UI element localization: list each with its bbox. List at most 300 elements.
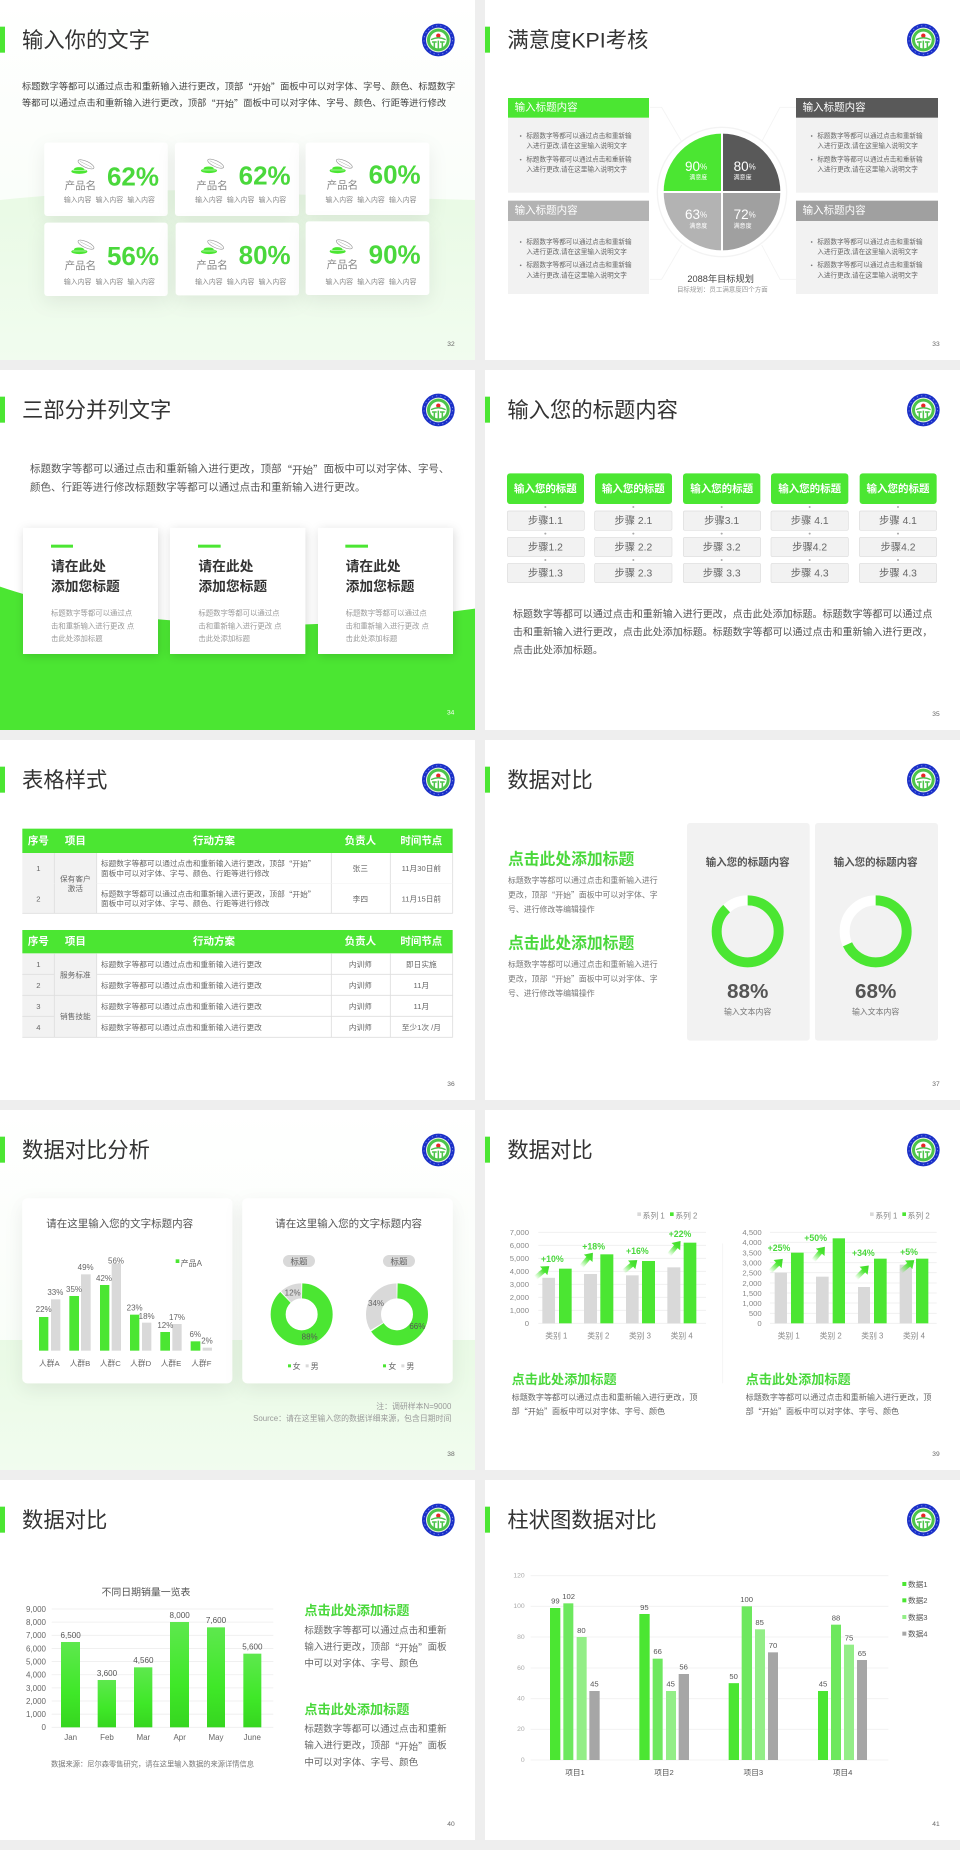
growth arrows [766, 1243, 918, 1282]
page number: 35 [932, 711, 940, 718]
slide 41: column chart comparison [485, 1480, 960, 1840]
axis labels: 60 [517, 1665, 525, 1672]
table 1: 11月15日前 [402, 894, 441, 904]
slide 40: monthly sales [0, 1480, 475, 1840]
pie chart: 90% [685, 159, 707, 174]
intro text [22, 79, 455, 110]
text block 2: 输入进行更改，顶部“开始”面板 [304, 1739, 447, 1753]
bar values: 56% [108, 1257, 124, 1266]
value labels: 80 [577, 1626, 586, 1635]
category labels: 项目1 [565, 1768, 585, 1777]
card: 80% [176, 223, 299, 295]
text block 1: 号、进行修改等编辑操作 [508, 904, 595, 914]
category labels: 人群F [191, 1358, 212, 1368]
bar values: 35% [66, 1285, 82, 1294]
category labels: 类别 3 [861, 1331, 883, 1341]
growth labels [541, 1229, 692, 1264]
table 1: 行动方案 [193, 834, 235, 847]
step column 3 [683, 473, 761, 583]
step column 5: 输入您的标题 [867, 482, 930, 495]
logo [907, 24, 940, 56]
axis labels: 0 [42, 1723, 47, 1732]
axis labels: 5,000 [26, 1657, 47, 1666]
bars [775, 1238, 928, 1323]
title: 满意度KPI考核 [507, 28, 648, 52]
card 3: 添加您标题 [346, 578, 415, 594]
text block right [746, 1371, 931, 1417]
axis labels [26, 1605, 47, 1732]
card: 80%: 80% [239, 240, 291, 270]
table 1: 李四 [353, 894, 368, 904]
axis labels: 4,500 [742, 1228, 762, 1237]
text block 1: 点击此处添加标题 [508, 850, 634, 869]
page number: 36 [447, 1081, 455, 1088]
connector lines [650, 107, 796, 279]
text block 1 [508, 850, 658, 914]
value labels [551, 1592, 866, 1689]
step column 3: 步骤 3.2 [703, 541, 741, 553]
table 2: 内训师 [349, 959, 372, 969]
card 2: 击此处添加标题 [198, 634, 251, 643]
axis labels: 9,000 [26, 1605, 47, 1614]
panel: bottom right: 标题数字等都可以通过点击和重新输 [817, 237, 923, 246]
text block 2: 标题数字等都可以通过点击和重新输入进行 [508, 959, 658, 969]
pie chart: 63% [685, 207, 707, 222]
table 2: 标题数字等都可以通过点击和重新输入进行更改 [101, 1001, 262, 1011]
panel: donut 68%: 68% [855, 980, 896, 1003]
card: 56%: 输入内容 输入内容 输入内容 [64, 277, 155, 286]
step column 2: 输入您的标题 [602, 482, 665, 495]
axis labels: 7,000 [26, 1631, 47, 1640]
legend [902, 1579, 928, 1639]
bar values: 23% [127, 1304, 143, 1313]
bar values [36, 1257, 213, 1346]
table 2: 序号 [28, 935, 49, 948]
table 2: 内训师 [349, 1001, 372, 1011]
intro text: 标题数字等都可以通过点击和重新输入进行更改，顶部“开始”面板中可以对字体、字号、颜色、标题数字 [22, 79, 455, 93]
panel: donut 88% [687, 823, 810, 1041]
title: 数据对比分析 [22, 1138, 150, 1162]
value labels: 66 [653, 1647, 662, 1656]
category labels: 项目4 [833, 1768, 853, 1777]
table 2: 时间节点 [400, 935, 443, 948]
bar values: 33% [47, 1288, 63, 1297]
source note: Source：请在这里输入您的数据详细来源，包含日期时间 [253, 1413, 451, 1423]
title: 数据对比 [507, 768, 593, 792]
panel: donut 68% [815, 823, 938, 1041]
text block 1 [304, 1602, 447, 1670]
step column 5: 步骤 4.1 [879, 515, 917, 527]
table 2: 内训师 [349, 1022, 372, 1032]
logo [422, 394, 455, 426]
value labels: 95 [640, 1603, 649, 1612]
logo [907, 764, 940, 796]
logo [907, 1504, 940, 1536]
card 3: 击和重新输入进行更改 点 [346, 622, 429, 631]
text block 1: 更改，顶部“开始”面板中可以对字体、字 [508, 890, 658, 901]
month labels: May [208, 1733, 224, 1742]
slide background [485, 740, 960, 1100]
step column 4: 输入您的标题 [778, 482, 842, 495]
category labels: 项目3 [744, 1768, 763, 1777]
value labels: 50 [729, 1672, 738, 1681]
table 1 [22, 829, 453, 913]
panel: top right: 标题数字等都可以通过点击和重新输 [817, 154, 923, 163]
step column 4 [771, 473, 848, 583]
card: 56%: 产品名 [65, 259, 96, 272]
logo [907, 1134, 940, 1166]
month labels: Jan [64, 1733, 77, 1742]
value labels: 56 [679, 1663, 688, 1672]
growth labels: +22% [669, 1229, 692, 1239]
card: 62% A: 输入内容 输入内容 输入内容 [64, 195, 155, 204]
panel: donut 88%: 输入您的标题内容 [706, 856, 790, 869]
card: 80%: 产品名 [196, 259, 228, 272]
bar values: 17% [169, 1313, 185, 1322]
donut right: 男 [406, 1362, 414, 1371]
value labels: 65 [858, 1649, 866, 1658]
axis labels: 120 [513, 1573, 525, 1580]
text block 1: 标题数字等都可以通过点击和重新输入进行 [508, 875, 658, 885]
category labels: 人群A [39, 1358, 60, 1368]
slide background [485, 370, 960, 730]
text block right: 点击此处添加标题 [746, 1371, 851, 1387]
axis labels [742, 1228, 762, 1328]
growth labels: +25% [768, 1243, 791, 1253]
axis labels: 4,000 [510, 1267, 529, 1276]
page number: 33 [932, 341, 940, 348]
title accent bar [0, 397, 5, 423]
axis labels: 8,000 [26, 1618, 47, 1627]
category labels: 类别 4 [671, 1331, 693, 1341]
legend: 数据2 [908, 1595, 928, 1605]
panel: top left: 输入标题内容 [515, 101, 578, 114]
title: 输入您的标题内容 [507, 398, 678, 422]
donut right: 66% [409, 1322, 425, 1331]
card 2: 标题数字等都可以通过点 [198, 609, 279, 618]
category labels: 类别 1 [545, 1331, 567, 1341]
axis labels: 3,000 [742, 1259, 762, 1268]
axis labels [510, 1228, 529, 1328]
category labels: 类别 1 [778, 1331, 800, 1341]
column chart [513, 1573, 888, 1777]
axis labels: 1,000 [26, 1710, 47, 1719]
legend [637, 1211, 697, 1221]
slide background [0, 0, 475, 360]
panel: bottom left: 输入标题内容 [515, 204, 578, 217]
value labels: 75 [845, 1634, 853, 1643]
panel: donut 68%: 输入您的标题内容 [834, 856, 918, 869]
axis labels [513, 1573, 525, 1764]
paragraph: 标题数字等都可以通过点击和重新输入进行更改，点击此处添加标题。标题数字等都可以通过点 [513, 607, 932, 620]
title accent bar [0, 767, 5, 793]
table 1: 标题数字等都可以通过点击和重新输入进行更改，顶部“开始” [101, 858, 315, 869]
card 1: 请在此处 [51, 558, 106, 574]
pie caption: 2088年目标规划 [687, 273, 754, 284]
slide background [0, 370, 475, 730]
sales bar chart [26, 1585, 273, 1769]
value labels [61, 1611, 263, 1678]
value labels: 7,600 [206, 1616, 227, 1625]
source note: 注：调研样本N=9000 [376, 1401, 452, 1411]
month labels: Mar [136, 1733, 151, 1742]
pie caption: 目标规划：员工满意度四个方面 [677, 284, 768, 293]
slide background [0, 740, 475, 1100]
pie chart: 满意度 [689, 222, 707, 230]
table 2: 11月 [414, 1002, 429, 1011]
value labels: 6,500 [61, 1631, 81, 1640]
table 1: 时间节点 [400, 834, 443, 847]
bars [542, 1243, 696, 1323]
title accent bar [485, 27, 490, 53]
legend: 数据3 [908, 1612, 928, 1622]
title: 三部分并列文字 [22, 398, 171, 422]
card: 90%: 产品名 [327, 258, 358, 271]
growth labels: +10% [541, 1254, 564, 1264]
card 1 [23, 528, 158, 654]
category labels [545, 1331, 693, 1341]
growth labels: +16% [626, 1246, 649, 1256]
text block left [512, 1371, 697, 1417]
bar values: 6% [190, 1330, 201, 1339]
donut left [278, 1255, 325, 1371]
card: 60% [306, 143, 429, 215]
card: 62% B [175, 143, 299, 216]
donut left: 男 [311, 1362, 319, 1371]
bar values: 49% [78, 1263, 94, 1272]
category labels [778, 1331, 926, 1341]
project 1 bars [550, 1603, 600, 1760]
panel: top right [796, 98, 938, 193]
card 1: 击和重新输入进行更改 点 [51, 622, 134, 631]
panel: bar chart [22, 1198, 232, 1383]
category labels: 人群E [161, 1358, 181, 1368]
table 1: 面板中可以对字体、字号、颜色、行距等进行修改 [101, 898, 270, 908]
panel: top right: 输入标题内容 [803, 101, 866, 114]
intro text: 标题数字等都可以通过点击和重新输入进行更改，顶部“开始”面板中可以对字体、字号、 [30, 462, 449, 477]
table 1: 面板中可以对字体、字号、颜色、行距等进行修改 [101, 868, 270, 878]
step column 4: 步骤 4.1 [791, 515, 829, 527]
text block 2: 中可以对字体、字号、颜色 [304, 1757, 419, 1769]
panel: donut 88%: 88% [727, 980, 768, 1003]
panel: top left: 标题数字等都可以通过点击和重新输 [526, 154, 632, 163]
table 2: 项目 [65, 936, 86, 948]
panel: top right: 入进行更改,请在这里输入说明文字 [817, 164, 918, 173]
green wave [0, 587, 475, 730]
legend: 系列 1 [875, 1211, 897, 1221]
page number: 37 [932, 1081, 940, 1088]
card: 60%: 产品名 [327, 178, 358, 191]
value labels: 45 [590, 1680, 599, 1689]
step column 3: 步骤3.1 [704, 515, 739, 527]
card: 62% A: 62% [107, 161, 159, 191]
axis labels: 20 [517, 1726, 525, 1733]
table 2: 即日实施 [406, 959, 437, 969]
intro text: 颜色、行距等进行修改标题数字等都可以通过点击和重新输入进行更改。 [30, 481, 366, 494]
source note [253, 1401, 452, 1423]
bar values: 22% [36, 1305, 52, 1314]
axis labels: 1,000 [742, 1299, 762, 1308]
step column 1: 步骤1.2 [528, 541, 563, 553]
category labels: 人群D [130, 1358, 152, 1368]
slide background [485, 1110, 960, 1470]
axis labels: 0 [525, 1319, 529, 1328]
card 1: 击此处添加标题 [51, 634, 103, 643]
slide 39: data comparison bars with growth [485, 1110, 960, 1470]
text block left: 部“开始”面板中可以对字体、字号、颜色 [512, 1406, 665, 1417]
value labels: 100 [740, 1595, 753, 1604]
category labels: 类别 2 [587, 1331, 609, 1341]
card: 60%: 输入内容 输入内容 输入内容 [325, 195, 417, 204]
step column 1: 输入您的标题 [514, 482, 577, 495]
card: 62% B: 产品名 [196, 179, 228, 192]
bars [61, 1622, 261, 1727]
card: 62% A: 产品名 [65, 179, 96, 192]
table 2: 2 [36, 981, 40, 990]
legend: 系列 2 [908, 1211, 930, 1221]
title: 数据对比 [22, 1508, 107, 1532]
card: 62% A [44, 143, 168, 216]
text block right: 部“开始”面板中可以对字体、字号、颜色 [746, 1406, 899, 1417]
panel: top left [508, 98, 649, 193]
axis labels: 4,000 [26, 1671, 47, 1680]
panel: donut 88%: 输入文本内容 [724, 1007, 771, 1017]
text block 1: 标题数字等都可以通过点击和重新 [304, 1624, 447, 1636]
page number: 41 [932, 1821, 940, 1828]
pie chart [657, 127, 787, 257]
panel: top left: 入进行更改,请在这里输入说明文字 [526, 141, 627, 150]
panel: bottom left: 入进行更改,请在这里输入说明文字 [526, 247, 627, 256]
growth labels [768, 1233, 918, 1258]
page number: 32 [447, 341, 455, 348]
panel: top left: 标题数字等都可以通过点击和重新输 [526, 131, 632, 140]
card: 80%: 输入内容 输入内容 输入内容 [195, 277, 286, 286]
card 1: 标题数字等都可以通过点 [51, 609, 132, 618]
step column 5 [859, 473, 937, 583]
table 1: 保有客户 [60, 874, 91, 884]
text block 1: 输入进行更改，顶部“开始”面板 [304, 1640, 447, 1654]
panel: top right: 入进行更改,请在这里输入说明文字 [817, 141, 918, 150]
value labels: 85 [755, 1618, 764, 1627]
table 1: 标题数字等都可以通过点击和重新输入进行更改，顶部“开始” [101, 889, 315, 900]
card: 90%: 输入内容 输入内容 输入内容 [325, 277, 417, 286]
table 2: 标题数字等都可以通过点击和重新输入进行更改 [101, 959, 262, 969]
value labels: 70 [769, 1641, 777, 1650]
value labels: 3,600 [97, 1669, 118, 1678]
table 1: 负责人 [345, 834, 377, 847]
step column 4: 步骤4.2 [792, 541, 827, 553]
chart left [510, 1211, 706, 1341]
step column 5: 步骤4.2 [880, 541, 916, 553]
title accent bar [485, 767, 490, 793]
slide 32: product percentages [0, 0, 475, 360]
legend: 系列 2 [675, 1211, 697, 1221]
card 2: 添加您标题 [198, 578, 267, 594]
value labels: 8,000 [170, 1611, 190, 1620]
text block 1: 点击此处添加标题 [304, 1602, 409, 1618]
text block left: 标题数字等都可以通过点击和重新输入进行更改，顶 [512, 1392, 697, 1402]
growth arrows [532, 1237, 685, 1282]
title: 表格样式 [22, 768, 107, 792]
table 1: 11月30日前 [402, 863, 441, 873]
panel: bottom left: 入进行更改,请在这里输入说明文字 [526, 270, 627, 279]
axis labels: 0 [521, 1757, 525, 1764]
axis labels: 2,000 [510, 1293, 529, 1302]
value labels: 88 [832, 1614, 840, 1623]
table 2: 销售技能 [60, 1011, 91, 1021]
category labels: 类别 2 [820, 1331, 842, 1341]
axis labels: 0 [757, 1319, 762, 1328]
table 2: 服务标准 [60, 970, 91, 980]
legend: product A: 产品A [181, 1258, 203, 1268]
text block 1: 中可以对字体、字号、颜色 [304, 1658, 419, 1670]
sales bar chart: 不同日期销量一览表 [102, 1585, 191, 1598]
donut right: 标题 [391, 1256, 408, 1266]
card 3: 请在此处 [346, 558, 401, 574]
donut left: 女 [293, 1361, 301, 1371]
table 2: 4 [36, 1023, 41, 1032]
panel: bottom right: 入进行更改,请在这里输入说明文字 [817, 270, 918, 279]
card: 60%: 60% [369, 160, 421, 190]
slide 36: table style [0, 740, 475, 1100]
step column 1 [507, 473, 584, 583]
table 1: 张三 [353, 864, 368, 873]
panel: bottom left: 标题数字等都可以通过点击和重新输 [526, 260, 632, 269]
bar values: 18% [139, 1312, 155, 1321]
month labels: Feb [100, 1733, 114, 1742]
page number: 34 [447, 709, 455, 716]
axis labels: 7,000 [510, 1228, 529, 1237]
card: 56% [44, 223, 168, 296]
table 2: 11月 [414, 981, 429, 990]
growth labels: +18% [582, 1241, 605, 1251]
month labels: Apr [173, 1733, 186, 1742]
panel: bottom right: 标题数字等都可以通过点击和重新输 [817, 260, 923, 269]
card 3: 标题数字等都可以通过点 [346, 609, 427, 618]
slide 35: step columns [485, 370, 960, 730]
category labels [39, 1358, 212, 1368]
bar values: 42% [96, 1274, 112, 1283]
axis labels: 6,000 [510, 1241, 529, 1250]
donut right: 女 [388, 1361, 396, 1371]
slide 34: three parallel cards [0, 370, 475, 730]
text block left: 点击此处添加标题 [512, 1371, 617, 1387]
month labels [64, 1733, 262, 1742]
axis labels: 2,000 [26, 1697, 47, 1706]
grouped bars [39, 1263, 212, 1351]
card 3 [318, 528, 453, 654]
page number: 38 [447, 1451, 455, 1458]
text block 2 [508, 934, 658, 998]
table 2: 标题数字等都可以通过点击和重新输入进行更改 [101, 980, 262, 990]
slide background [0, 1480, 475, 1840]
text block 2: 更改，顶部“开始”面板中可以对字体、字 [508, 974, 658, 985]
pie chart: 满意度 [734, 174, 752, 182]
step column 4: 步骤 4.3 [791, 568, 829, 580]
intro text: 等都可以通过点击和重新输入进行更改，顶部“开始”面板中可以对字体、字号、颜色、行距等进行修改 [22, 96, 446, 110]
axis labels: 500 [749, 1309, 762, 1318]
sales bar chart: 数据来源：尼尔森零售研究，请在这里输入数据的来源详情信息 [51, 1760, 254, 1769]
step column 2: 步骤 2.2 [614, 541, 653, 553]
title accent bar [0, 1137, 5, 1163]
bar values: 12% [157, 1321, 173, 1330]
title: 输入你的文字 [22, 28, 150, 52]
value labels: 4,560 [133, 1656, 154, 1665]
title accent bar [485, 397, 490, 423]
axis labels: 100 [513, 1603, 525, 1610]
card 2: 请在此处 [198, 558, 254, 574]
panel: top right: 标题数字等都可以通过点击和重新输 [817, 131, 923, 140]
